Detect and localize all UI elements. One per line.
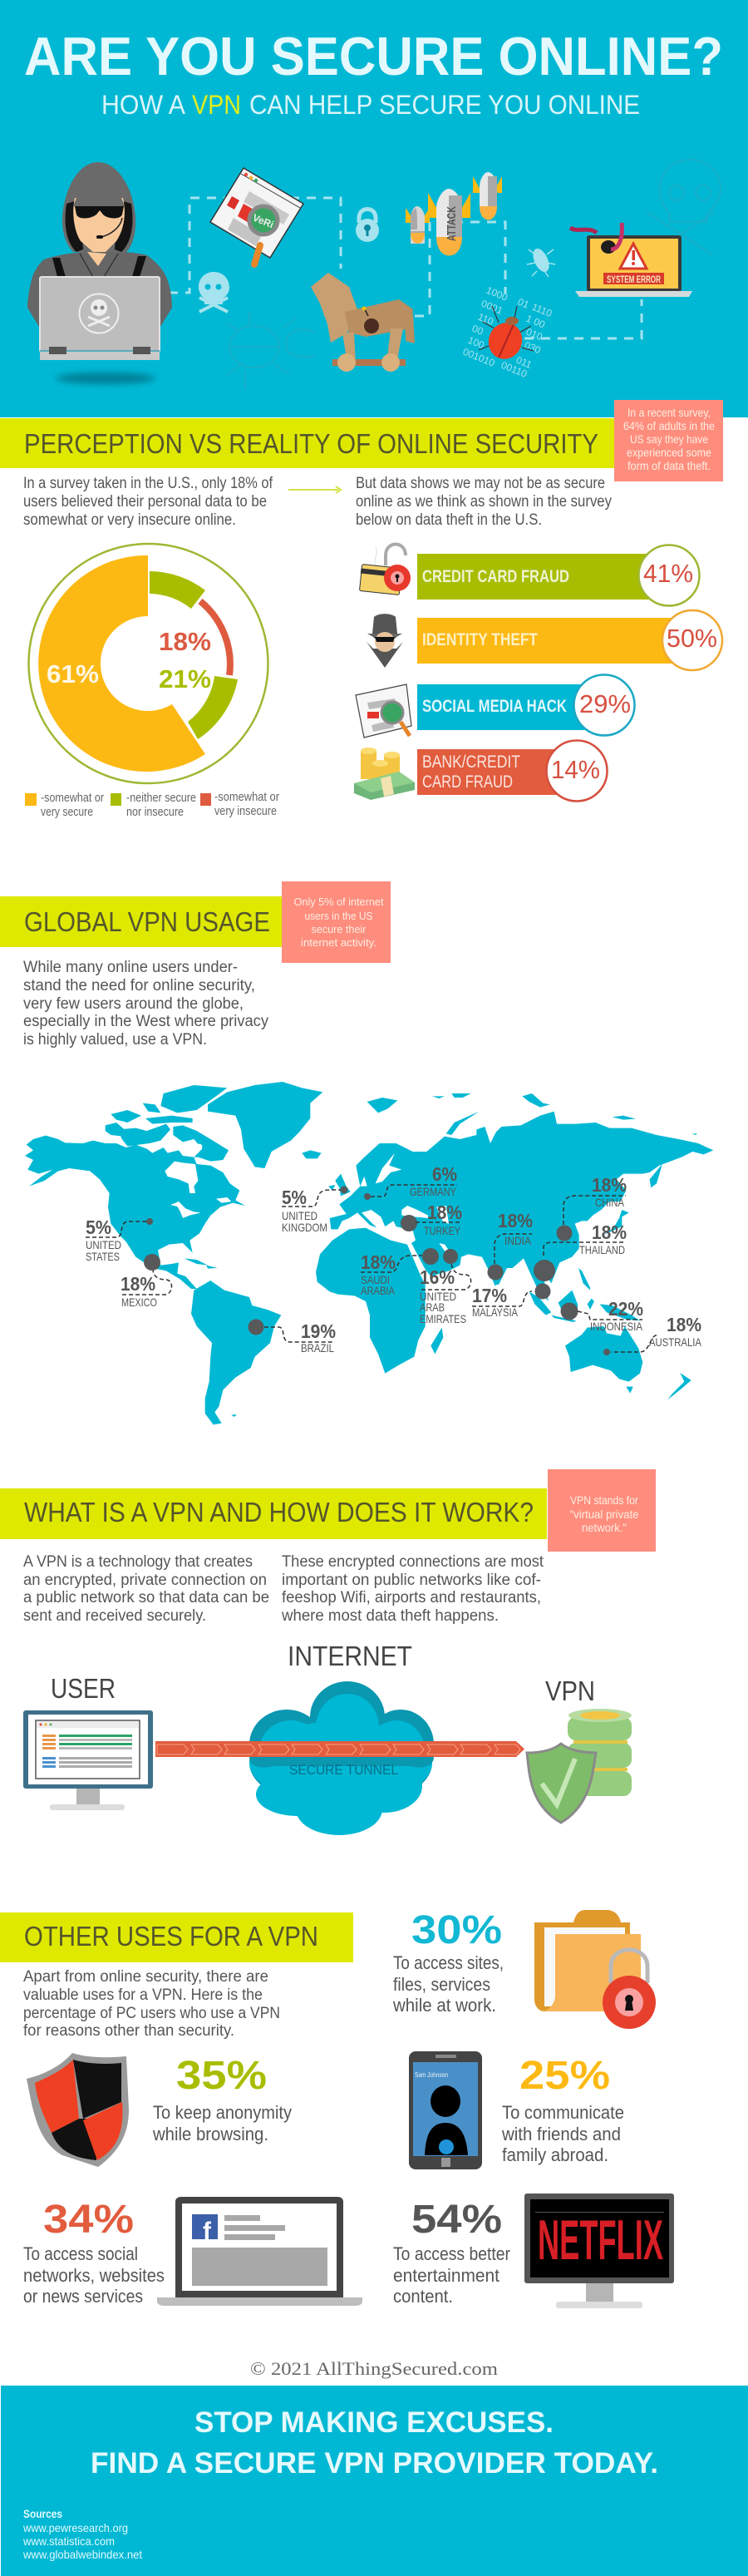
- icon: background skull outline: [647, 160, 721, 255]
- stat: 30 percent work: To access sites,: [393, 1952, 504, 1973]
- callout: [614, 400, 723, 481]
- stat: 35 percent anonymity: 35%: [176, 2054, 267, 2098]
- callout: Only 5% of internet: [294, 896, 384, 908]
- map labels: 17%: [472, 1285, 507, 1306]
- icon: red bug and binary code: 1 00: [524, 313, 547, 331]
- icon: red bug and binary code: 001010: [461, 346, 497, 369]
- stat: 25 percent communicate: [409, 2051, 624, 2169]
- icon: user monitor: [23, 1710, 153, 1810]
- text block: data intro: online as we think as shown in the survey: [356, 493, 612, 511]
- subtitle: VPN: [192, 90, 241, 120]
- section: what is a vpn: [0, 1469, 656, 1835]
- text block: definition: [23, 1553, 269, 1625]
- subtitle: HOW A: [101, 90, 186, 120]
- heading: GLOBAL VPN USAGE: [24, 906, 270, 937]
- sources: www.globalwebindex.net: [22, 2548, 142, 2561]
- icon: vpn server and shield: [527, 1709, 632, 1823]
- icon: red bug and binary code: 01: [516, 296, 531, 311]
- call to action: [91, 2406, 658, 2480]
- legend: very insecure: [214, 805, 277, 818]
- map labels: UNITED: [420, 1290, 456, 1303]
- map labels: UNITED: [86, 1238, 121, 1251]
- stat: 34 percent social: networks, websites: [23, 2265, 165, 2286]
- diagram labels: [51, 1641, 595, 1706]
- icon: red bug and binary code: 0001: [480, 298, 504, 317]
- legend: -neither secure: [126, 792, 196, 805]
- stat bar: credit card fraud: 41%: [643, 559, 693, 588]
- callout: 64% of adults in the: [623, 419, 715, 432]
- stat: 34 percent social: 34%: [43, 2198, 134, 2242]
- icon: shield: [27, 2053, 129, 2167]
- callout: experienced some: [627, 446, 711, 459]
- map labels: ARABIA: [361, 1284, 396, 1297]
- map labels: 18%: [498, 1210, 533, 1231]
- text block: definition: A VPN is a technology that creates: [23, 1553, 253, 1571]
- heading: PERCEPTION VS REALITY OF ONLINE SECURITY: [24, 428, 598, 459]
- stat bar: identity theft: [367, 610, 722, 670]
- stat: 30 percent work: [392, 1908, 656, 2029]
- stat: 25 percent communicate: family abroad.: [502, 2144, 608, 2165]
- donut chart: 61%: [47, 659, 99, 688]
- world map: [25, 1082, 713, 1424]
- stat: 30 percent work: while at work.: [392, 1995, 496, 2016]
- stat: 25 percent communicate: To communicate: [502, 2102, 624, 2123]
- map labels: 22%: [608, 1298, 643, 1320]
- text block: [23, 1968, 280, 2040]
- callout: [548, 1469, 656, 1552]
- legend: -somewhat or: [41, 792, 104, 805]
- sources: www.pewresearch.org: [22, 2521, 128, 2534]
- map labels: 6%: [432, 1163, 457, 1185]
- callout: In a recent survey,: [627, 406, 711, 419]
- stat bar: credit card fraud: CREDIT CARD FRAUD: [422, 567, 569, 586]
- call to action: STOP MAKING EXCUSES.: [194, 2406, 554, 2439]
- icon: red bug and binary code: [461, 284, 554, 380]
- icon: internet cloud: SECURE TUNNEL: [289, 1762, 398, 1778]
- callout: users in the US: [304, 910, 373, 922]
- callout: form of data theft.: [627, 459, 711, 472]
- text block: definition: a public network so that data can be: [23, 1589, 269, 1606]
- map labels: GERMANY: [410, 1185, 457, 1198]
- map labels: MEXICO: [121, 1295, 157, 1309]
- icon: small skull: [199, 272, 229, 312]
- text block: very few users around the globe,: [23, 995, 244, 1013]
- icon: padlock: [356, 210, 379, 242]
- text block: [23, 959, 268, 1049]
- stat bar: social media hack: 29%: [579, 689, 631, 718]
- icon: laptop with facebook: f: [203, 2218, 212, 2245]
- stat: 54 percent entertainment: [393, 2194, 674, 2308]
- section: other uses: [0, 1908, 674, 2308]
- icon: coins and cash: [354, 748, 415, 800]
- stat bar: social media hack: SOCIAL MEDIA HACK: [422, 697, 567, 716]
- map labels: 5%: [282, 1187, 307, 1208]
- callout: "virtual private: [570, 1508, 639, 1521]
- icon: attack bombs: [406, 172, 502, 256]
- icon: phone: Sam Johnson: [415, 2071, 448, 2079]
- map labels: UNITED: [282, 1209, 317, 1222]
- legend: -somewhat or: [214, 791, 279, 804]
- icon: red bug and binary code: 110: [476, 311, 495, 328]
- stat: 30 percent work: 30%: [411, 1908, 502, 1952]
- text block: data intro: below on data theft in the U.S.: [356, 511, 542, 529]
- map labels: 18%: [592, 1221, 627, 1243]
- callout: secure their: [311, 923, 367, 935]
- stat: 25 percent communicate: 25%: [519, 2054, 610, 2098]
- icon: system error laptop: [570, 223, 692, 297]
- map labels: BRAZIL: [301, 1341, 334, 1355]
- call to action: FIND A SECURE VPN PROVIDER TODAY.: [91, 2447, 658, 2480]
- header panel: [0, 0, 748, 417]
- text block: survey intro: somewhat or very insecure online.: [23, 511, 236, 529]
- text block: percentage of PC users who use a VPN: [23, 2005, 280, 2022]
- legend: nor insecure: [126, 806, 184, 819]
- heading: OTHER USES FOR A VPN: [24, 1921, 318, 1952]
- map labels: INDIA: [504, 1234, 532, 1247]
- map labels: 18%: [592, 1174, 627, 1196]
- map labels: AUSTRALIA: [649, 1335, 702, 1349]
- text block: survey intro: In a survey taken in the U.S., only 18% of: [23, 475, 273, 492]
- icon: hacked browser: [356, 684, 411, 738]
- subtitle: [101, 90, 640, 120]
- map labels: STATES: [86, 1250, 120, 1263]
- icon: red bug and binary code: 00110: [499, 359, 529, 380]
- icon: netflix monitor: [524, 2194, 674, 2308]
- legend: [25, 791, 279, 819]
- icon: background bug outline: [226, 312, 314, 388]
- icon: red bug and binary code: 00: [470, 323, 485, 338]
- map labels: TURKEY: [424, 1224, 461, 1237]
- arrow: secure tunnel: [155, 1741, 524, 1757]
- icon: hacked login browser: [210, 168, 303, 264]
- text block: valuable uses for a VPN. Here is the: [23, 1986, 263, 2004]
- map labels: CHINA: [595, 1196, 625, 1209]
- map labels: 18%: [121, 1273, 155, 1295]
- stat: 34 percent social: [23, 2197, 362, 2307]
- heading band: [0, 896, 282, 947]
- callout: US say they have: [630, 432, 708, 446]
- callout: VPN stands for: [570, 1493, 638, 1507]
- stat: 54 percent entertainment: To access better: [393, 2243, 510, 2264]
- icon: red bug and binary code: 030: [523, 339, 543, 356]
- stat: 54 percent entertainment: entertainment: [393, 2265, 499, 2286]
- legend: very secure: [41, 806, 93, 819]
- text block: stand the need for online security,: [23, 977, 255, 994]
- icon: red bug and binary code: 010: [524, 326, 544, 343]
- text block: While many online users under-: [23, 959, 238, 976]
- map labels: 18%: [361, 1251, 396, 1273]
- stat: 35 percent anonymity: [27, 2053, 292, 2167]
- arrow: [288, 486, 341, 493]
- heading band: [0, 1912, 353, 1962]
- text block: survey intro: [23, 475, 273, 529]
- stat: 30 percent work: files, services: [393, 1974, 490, 1995]
- text block: where it matters: [281, 1553, 544, 1625]
- text block: especially in the West where privacy: [23, 1013, 268, 1030]
- stat bar: identity theft: IDENTITY THEFT: [422, 630, 538, 649]
- stat: 34 percent social: To access social: [23, 2243, 138, 2264]
- callout: [282, 881, 391, 963]
- icon: credit card and lock: [359, 544, 411, 595]
- icon: light bug: [527, 246, 555, 277]
- dashed connector lines: [169, 198, 642, 338]
- stat: 25 percent communicate: with friends and: [501, 2124, 621, 2144]
- text block: survey intro: users believed their personal data to be: [23, 493, 267, 511]
- stat bar: bank fraud: [354, 740, 607, 802]
- map markers: [144, 1186, 610, 1355]
- icon: red bug and binary code: 100: [466, 334, 486, 351]
- map labels: INDONESIA: [590, 1320, 643, 1333]
- icon: folder with lock: [534, 1910, 656, 2029]
- map labels: 18%: [427, 1202, 462, 1223]
- heading band: [0, 1488, 547, 1539]
- stat: 35 percent anonymity: To keep anonymity: [153, 2102, 292, 2123]
- donut chart: 21%: [159, 664, 211, 693]
- diagram labels: USER: [51, 1673, 116, 1704]
- icon: system error laptop: SYSTEM ERROR: [607, 274, 661, 285]
- footer panel: [1, 2386, 748, 2576]
- text block: where it matters: These encrypted connections are most: [282, 1553, 544, 1571]
- icon: trojan horse: [311, 273, 415, 372]
- stat: 54 percent entertainment: content.: [393, 2286, 453, 2307]
- sources: Sources: [23, 2507, 62, 2520]
- icon: hacker with laptop: [27, 162, 172, 384]
- text block: is highly valued, use a VPN.: [23, 1031, 207, 1049]
- stat: 35 percent anonymity: while browsing.: [152, 2124, 268, 2144]
- icon: attack bombs: ATTACK: [445, 206, 459, 241]
- heading: WHAT IS A VPN AND HOW DOES IT WORK?: [24, 1497, 534, 1527]
- text block: for reasons other than security.: [23, 2022, 234, 2040]
- callout: internet activity.: [301, 936, 376, 949]
- icon: red bug and binary code: 011: [514, 354, 534, 371]
- text block: where it matters: feeshop Wifi, airports and restaurants,: [282, 1589, 541, 1606]
- map labels: EMIRATES: [420, 1312, 466, 1325]
- donut chart: [28, 544, 268, 783]
- map labels: KINGDOM: [282, 1221, 327, 1234]
- icon: red bug and binary code: 1000: [485, 284, 509, 303]
- diagram labels: VPN: [545, 1675, 595, 1706]
- stat bar: bank fraud: BANK/CREDIT: [422, 753, 520, 772]
- map labels: 16%: [420, 1266, 455, 1288]
- sources: [22, 2507, 142, 2561]
- heading band: [0, 418, 614, 468]
- map leader lines: [86, 1185, 657, 1352]
- section: global vpn usage: [0, 881, 713, 1424]
- map labels: SAUDI: [361, 1273, 390, 1286]
- icon: phone: [409, 2051, 482, 2169]
- stat: 54 percent entertainment: 54%: [411, 2198, 502, 2242]
- text block: where it matters: where most data theft happens.: [281, 1607, 499, 1625]
- icon: spy: [367, 614, 403, 668]
- stat bar: credit card fraud: [359, 544, 700, 605]
- text block: where it matters: important on public networks like cof-: [282, 1572, 541, 1589]
- section: perception vs reality: [0, 400, 723, 819]
- map labels: 5%: [86, 1216, 111, 1238]
- text block: data intro: [356, 475, 612, 529]
- text block: definition: an encrypted, private connection on: [23, 1572, 267, 1589]
- text block: data intro: But data shows we may not be as secure: [356, 475, 605, 492]
- icon: hacked login browser: VeRi: [251, 212, 275, 230]
- map labels: [86, 1163, 702, 1355]
- icon: laptop with facebook: [157, 2197, 362, 2306]
- title: ARE YOU SECURE ONLINE?: [24, 26, 723, 86]
- text block: definition: sent and received securely.: [23, 1607, 206, 1625]
- icon: red bug and binary code: 1110: [530, 301, 554, 319]
- stat bar: identity theft: 50%: [667, 624, 717, 653]
- stat bar: bank fraud: 14%: [551, 755, 600, 784]
- stat: 34 percent social: or news services: [23, 2286, 143, 2307]
- map labels: 18%: [667, 1314, 701, 1335]
- donut chart: 18%: [159, 627, 211, 656]
- callout: network.": [582, 1521, 627, 1534]
- diagram labels: INTERNET: [288, 1641, 412, 1671]
- subtitle: CAN HELP SECURE YOU ONLINE: [249, 90, 640, 120]
- map labels: THAILAND: [579, 1243, 625, 1256]
- map labels: 19%: [301, 1320, 336, 1342]
- icon: internet cloud: [249, 1681, 434, 1835]
- stat bar: bank fraud: CARD FRAUD: [422, 772, 513, 792]
- text block: Apart from online security, there are: [23, 1968, 268, 1986]
- sources: www.statistica.com: [22, 2534, 115, 2548]
- copyright: © 2021 AllThingSecured.com: [250, 2358, 498, 2379]
- stat bar: social media hack: [356, 675, 635, 738]
- map labels: MALAYSIA: [472, 1305, 519, 1319]
- map labels: ARAB: [420, 1300, 445, 1314]
